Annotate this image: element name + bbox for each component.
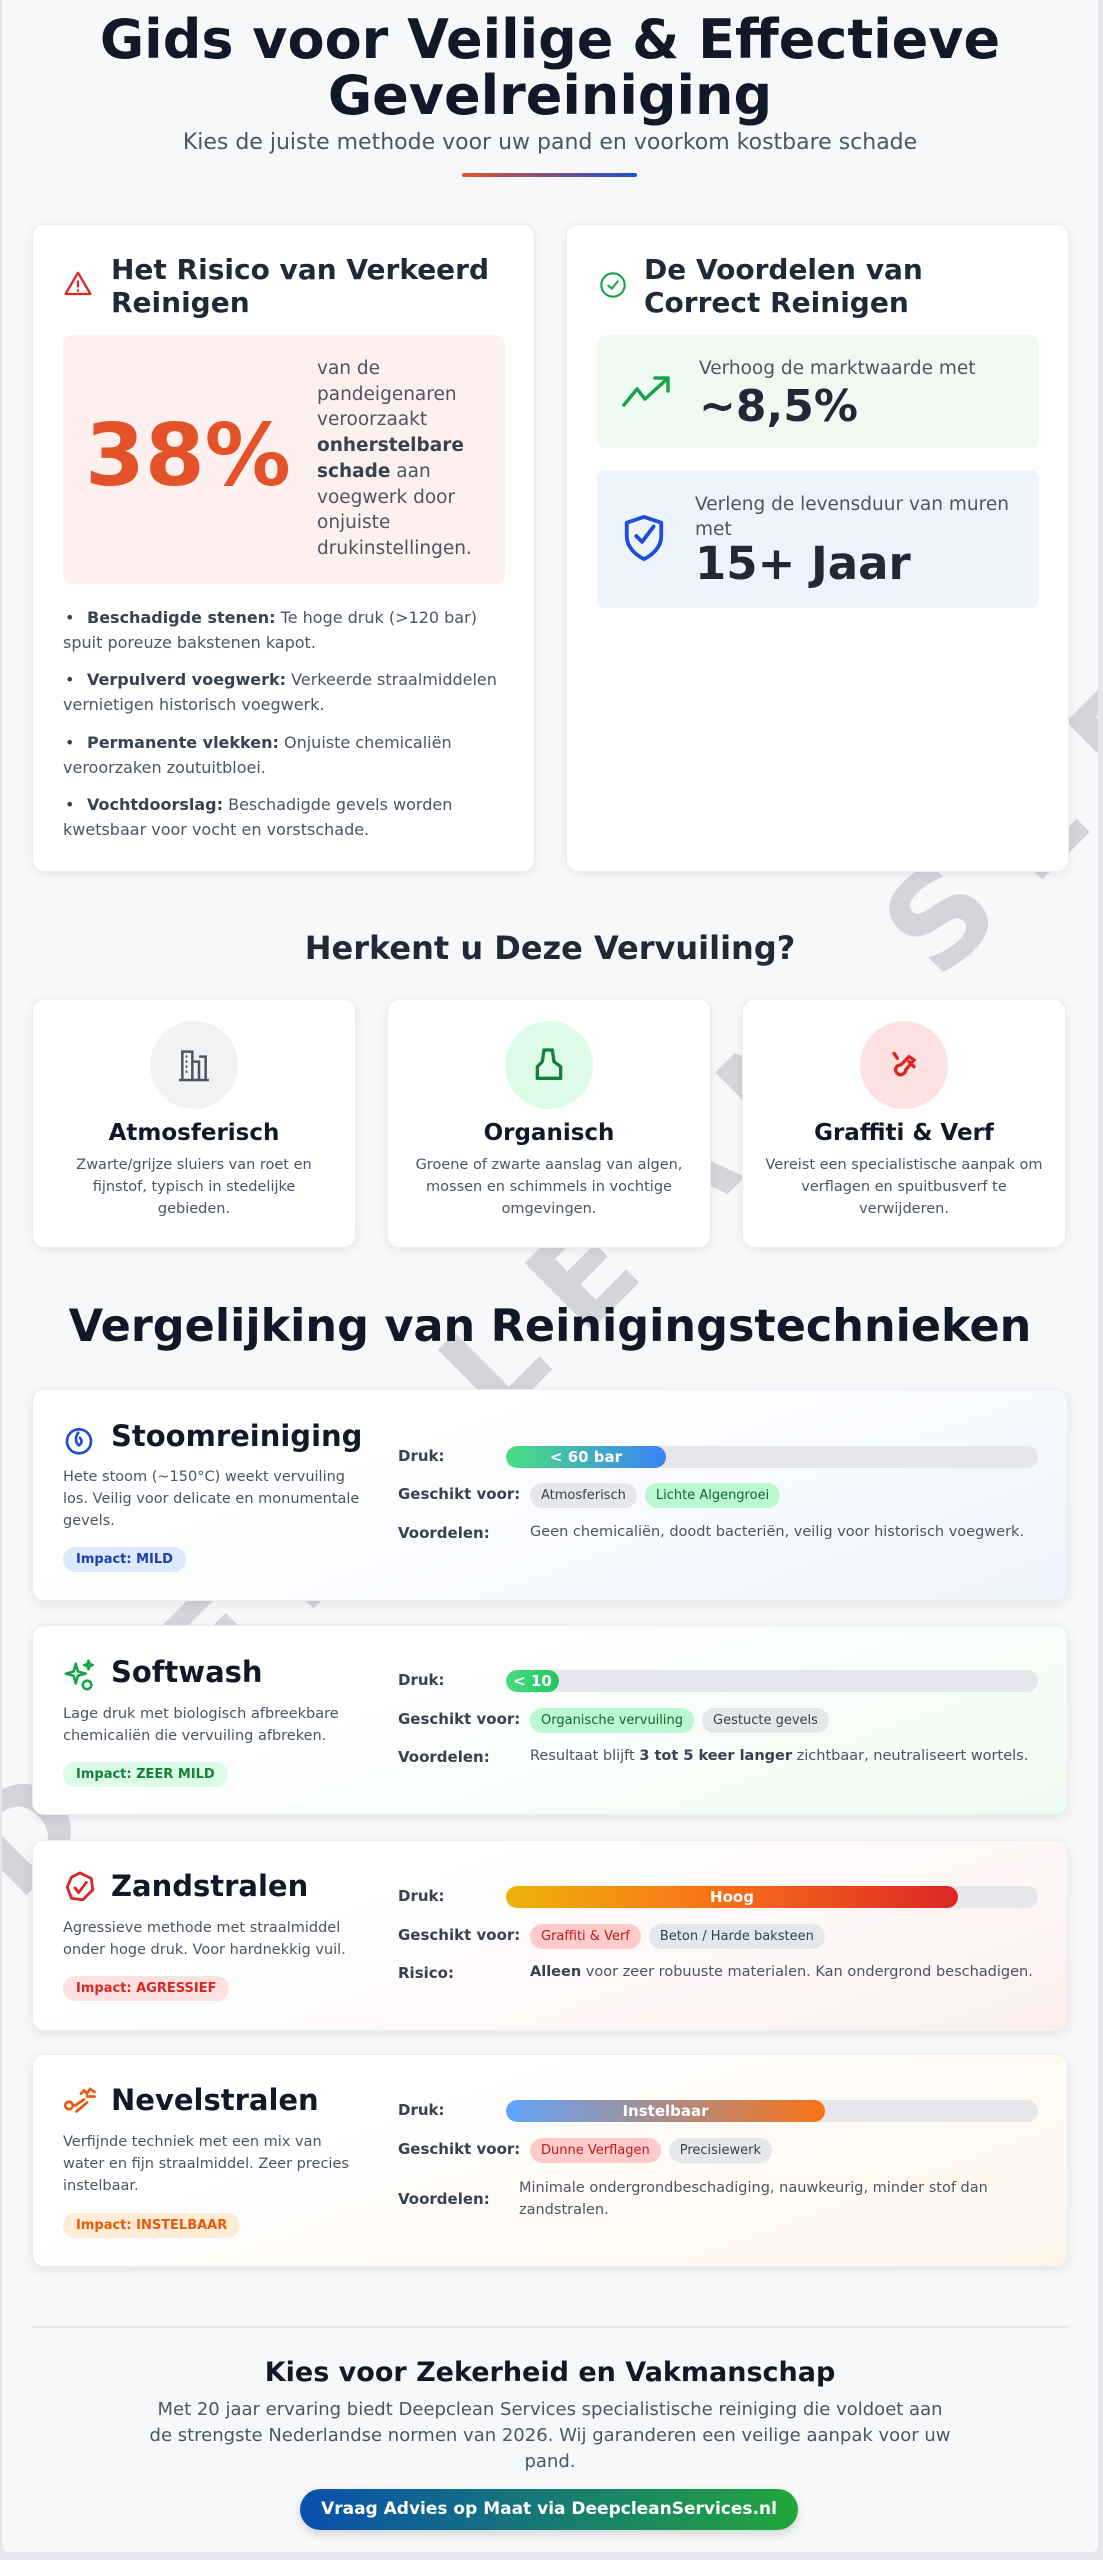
pressure bar: Druk: (398, 1887, 445, 1905)
stat box: lifespan (597, 470, 1039, 608)
method card: nevelstralen (32, 2054, 1068, 2267)
pollution card: atmosferisch (32, 999, 356, 1248)
icon: building (150, 1021, 238, 1109)
method card: zandstralen: Beton / Harde baksteen (660, 1929, 814, 1944)
method card: stoomreiniging: Lichte Algengroei (656, 1488, 769, 1503)
method card: softwash: Resultaat blijft 3 tot 5 keer langer zichtbaar, neutraliseert wortels. (530, 1748, 1028, 1764)
method title: Softwash (111, 1655, 263, 1689)
heading: conclusion: Kies voor Zekerheid en Vakmanschap (265, 2357, 835, 2388)
suitable tags: Geschikt voor: (398, 1926, 520, 1944)
stat text: Verleng de levensduur van muren met (695, 494, 1009, 540)
method description: Verfijnde techniek met een mix van water en fijn straalmiddel. Zeer precies instelbaar. (63, 2134, 349, 2194)
conclusion text: Met 20 jaar ervaring biedt Deepclean Services specialistische reiniging die voldoet aan (157, 2399, 943, 2420)
benefits: Voordelen: (398, 2190, 490, 2208)
text (76, 1120, 312, 1217)
icon: shield off (66, 1871, 94, 1902)
conclusion text (150, 2399, 950, 2472)
method description: Hete stoom (~150°C) weekt vervuiling los. Veilig voor delicate en monumentale gevels. (63, 1469, 359, 1529)
pressure bar: Druk: (398, 1671, 445, 1689)
icon: check circle (600, 272, 626, 298)
icon: warning (64, 272, 92, 296)
button: CTA (300, 2489, 798, 2530)
method card: stoomreiniging: Geen chemicaliën, doodt bacteriën, veilig voor historisch voegwerk. (530, 1524, 1024, 1540)
pressure bar: Druk: (398, 2101, 445, 2119)
impact badge: Impact: MILD (76, 1552, 173, 1567)
bullet list (63, 608, 497, 839)
heading: risks: Het Risico van Verkeerd (111, 253, 489, 286)
heading: pollution: Herkent u Deze Vervuiling? (305, 929, 795, 967)
title: Gids voor Veilige & Effectieve (100, 8, 1000, 71)
method card: softwash: Organische vervuiling (541, 1713, 683, 1728)
stat number: 38% (85, 406, 291, 506)
accent line (462, 173, 637, 177)
bullet 3: Permanente vlekken: Onjuiste chemicaliën veroorzaken zoutuitbloei. (63, 733, 452, 777)
method card: nevelstralen: Precisiewerk (680, 2143, 761, 2158)
suitable tags: Geschikt voor: (398, 2140, 520, 2158)
impact badge (63, 1547, 186, 1572)
method card: stoomreiniging (32, 1389, 1068, 1601)
heading: benefits: Correct Reinigen (644, 286, 909, 319)
panel: benefits (566, 224, 1069, 872)
heading: risks: Reinigen (111, 286, 250, 319)
subtitle: Kies de juiste methode voor uw pand en voorkom kostbare schade (183, 130, 917, 155)
pollution card: organisch (387, 999, 711, 1248)
method title: Nevelstralen (111, 2083, 319, 2117)
text (416, 1120, 682, 1217)
icon: mist (64, 2087, 96, 2113)
method card: zandstralen (32, 1840, 1068, 2031)
stat value: ~8,5% (699, 381, 858, 432)
method title: Zandstralen (111, 1869, 308, 1903)
benefits: Voordelen: (398, 1748, 490, 1766)
method card: nevelstralen: Dunne Verflagen (541, 2143, 650, 2158)
text: Groene of zwarte aanslag van algen, mossen en schimmels in vochtige omgevingen. (416, 1157, 682, 1217)
text: Organisch (484, 1120, 614, 1146)
stat value: 15+ Jaar (695, 537, 911, 590)
text (766, 1120, 1042, 1217)
bullet 2: Verpulverd voegwerk: Verkeerde straalmiddelen vernietigen historisch voegwerk. (63, 670, 497, 714)
heading: comparison: Vergelijking van Reinigingstechnieken (69, 1301, 1031, 1352)
bullet 4: Vochtdoorslag: Beschadigde gevels worden kwetsbaar voor vocht en vorstschade. (63, 795, 452, 839)
text: Graffiti & Verf (814, 1120, 994, 1146)
impact badge: Impact: ZEER MILD (76, 1767, 215, 1782)
conclusion text: de strengste Nederlandse normen van 2026. Wij garanderen een veilige aanpak voor uw pand. (150, 2425, 950, 2472)
risk: Risico: (398, 1964, 454, 1982)
impact badge (63, 1762, 228, 1787)
pressure bar: Druk: (398, 1447, 445, 1465)
icon: steam (66, 1428, 92, 1455)
icon: sparkles (64, 1660, 94, 1690)
method description: Lage druk met biologisch afbreekbare chemicaliën die vervuiling afbreken. (63, 1706, 339, 1744)
method card: zandstralen: Alleen voor zeer robuuste materialen. Kan ondergrond beschadigen. (530, 1964, 1033, 1980)
title: Gevelreiniging (328, 64, 772, 127)
icon: trend up (622, 376, 670, 407)
title (100, 8, 1000, 127)
impact badge: Impact: INSTELBAAR (76, 2218, 227, 2233)
text: Zwarte/grijze sluiers van roet en fijnstof, typisch in stedelijke gebieden. (76, 1157, 312, 1217)
method card: nevelstralen: Minimale ondergrondbeschadiging, nauwkeurig, minder stof dan zandstralen. (519, 2180, 988, 2218)
button: CTA: Vraag Advies op Maat via DeepcleanServices.nl (321, 2499, 777, 2519)
impact badge: Impact: AGRESSIEF (76, 1981, 216, 1996)
panel: risks (32, 224, 535, 872)
icon: spray (860, 1021, 948, 1109)
stat text: van de pandeigenaren veroorzaakt onherstelbare schade aan voegwerk door onjuiste drukinstellingen. (317, 358, 472, 559)
method card: softwash (32, 1625, 1068, 1815)
heading: benefits (644, 253, 923, 319)
method title: Stoomreiniging (111, 1419, 362, 1453)
method card: softwash: Gestucte gevels (713, 1713, 818, 1728)
text: Vereist een specialistische aanpak om verflagen en spuitbusverf te verwijderen. (766, 1157, 1042, 1217)
pollution card: graffiti (742, 999, 1066, 1248)
method card: stoomreiniging: Atmosferisch (541, 1488, 626, 1503)
suitable tags: Geschikt voor: (398, 1485, 520, 1503)
bullet 1: Beschadigde stenen: Te hoge druk (>120 bar) spuit poreuze bakstenen kapot. (63, 608, 477, 652)
icon: organic (505, 1021, 593, 1109)
stat box: market value (597, 335, 1039, 448)
impact badge (63, 2213, 240, 2238)
impact badge (63, 1976, 229, 2001)
method card: zandstralen: Hoog (710, 1888, 754, 1906)
method card: softwash: < 10 (513, 1672, 552, 1690)
method card: zandstralen: Graffiti & Verf (541, 1929, 630, 1944)
icon: shield (624, 515, 664, 561)
method card: stoomreiniging: < 60 bar (550, 1448, 622, 1466)
heading: benefits: De Voordelen van (644, 253, 923, 286)
text: Atmosferisch (109, 1120, 279, 1146)
stat text: Verhoog de marktwaarde met (699, 358, 976, 379)
method description: Agressieve methode met straalmiddel onder hoge druk. Voor hardnekkig vuil. (63, 1920, 346, 1958)
benefits: Voordelen: (398, 1524, 490, 1542)
heading: risks (111, 253, 489, 319)
stat box: 38% (63, 335, 505, 584)
suitable tags: Geschikt voor: (398, 1710, 520, 1728)
method card: nevelstralen: Instelbaar (622, 2102, 709, 2120)
